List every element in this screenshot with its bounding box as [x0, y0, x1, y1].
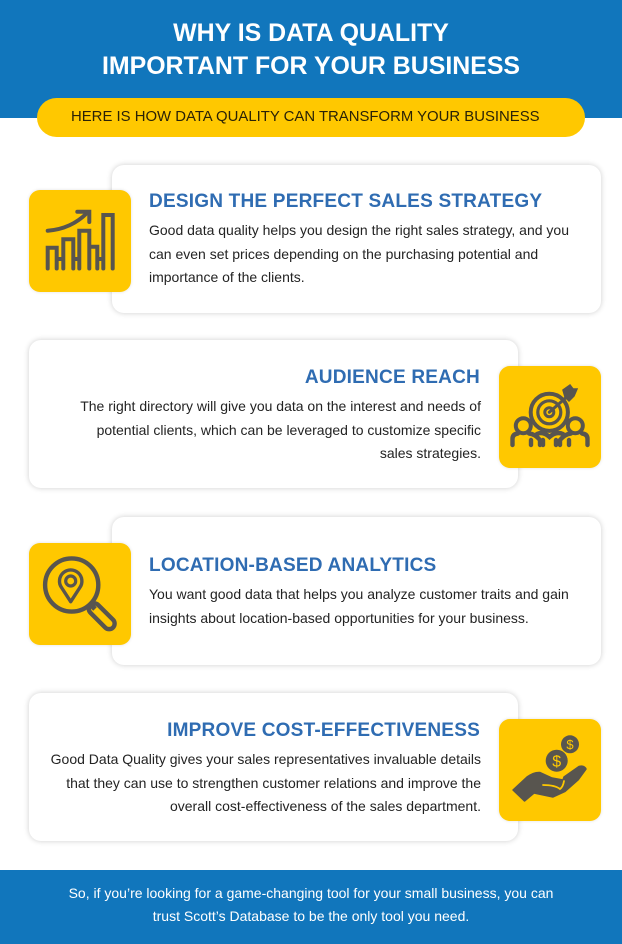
footer band: So, if you’re looking for a game-changing tool for your small business, you can	[69, 885, 553, 901]
heading: location-based analytics: LOCATION-BASED ANALYTICS	[149, 555, 436, 576]
heading: design the perfect sales strategy: DESIGN THE PERFECT SALES STRATEGY	[149, 191, 542, 212]
icon: growth chart	[29, 190, 131, 292]
text: sales strategy body: Good data quality helps you design the right sales strategy, and you	[149, 222, 569, 238]
footer band: trust Scott’s Database to be the only tool you need.	[153, 908, 469, 924]
header band	[0, 0, 622, 118]
heading: improve cost-effectiveness: IMPROVE COST-EFFECTIVENESS	[167, 720, 480, 741]
text: cost-effectiveness body: Good Data Quality gives your sales representatives invaluable details	[51, 751, 481, 767]
subtitle pill	[37, 98, 585, 137]
text: cost-effectiveness body: overall cost-effectiveness of the sales department.	[170, 798, 481, 814]
subtitle pill: HERE IS HOW DATA QUALITY CAN TRANSFORM YOUR BUSINESS	[71, 109, 540, 125]
text: cost-effectiveness body: that they can use to strengthen customer relations and improve the	[66, 774, 481, 790]
icon: hand with coins	[499, 719, 601, 821]
icon: hand with coins: $	[566, 737, 574, 752]
title	[102, 19, 520, 80]
text: cost-effectiveness body	[51, 751, 481, 814]
panel: sales strategy card	[28, 162, 604, 316]
text: location analytics body: You want good data that helps you analyze customer traits and gain	[149, 586, 569, 602]
footer band	[0, 870, 622, 944]
panel: location analytics card	[28, 514, 604, 668]
text: location analytics body: insights about location-based opportunities for your business.	[149, 610, 529, 626]
text: audience reach body: The right directory will give you data on the interest and needs of	[80, 398, 481, 414]
icon: magnifier with map pin	[29, 543, 131, 645]
title: IMPORTANT FOR YOUR BUSINESS	[102, 52, 520, 80]
text: audience reach body: potential clients, which can be leveraged to customize specific	[97, 422, 481, 438]
text: audience reach body: sales strategies.	[380, 445, 481, 461]
heading: audience reach: AUDIENCE REACH	[305, 367, 480, 388]
title: WHY IS DATA QUALITY	[173, 19, 449, 47]
text: sales strategy body: can even set prices depending on the purchasing potential and	[149, 246, 538, 262]
icon: hand with coins: $	[552, 754, 561, 770]
panel: audience reach card	[26, 338, 602, 490]
panel: cost-effectiveness card	[26, 690, 602, 844]
text: sales strategy body: importance of the clients.	[149, 269, 305, 285]
text: location analytics body	[149, 586, 569, 626]
text: sales strategy body	[149, 222, 569, 285]
icon: audience target	[499, 366, 601, 468]
text: audience reach body	[80, 398, 482, 461]
